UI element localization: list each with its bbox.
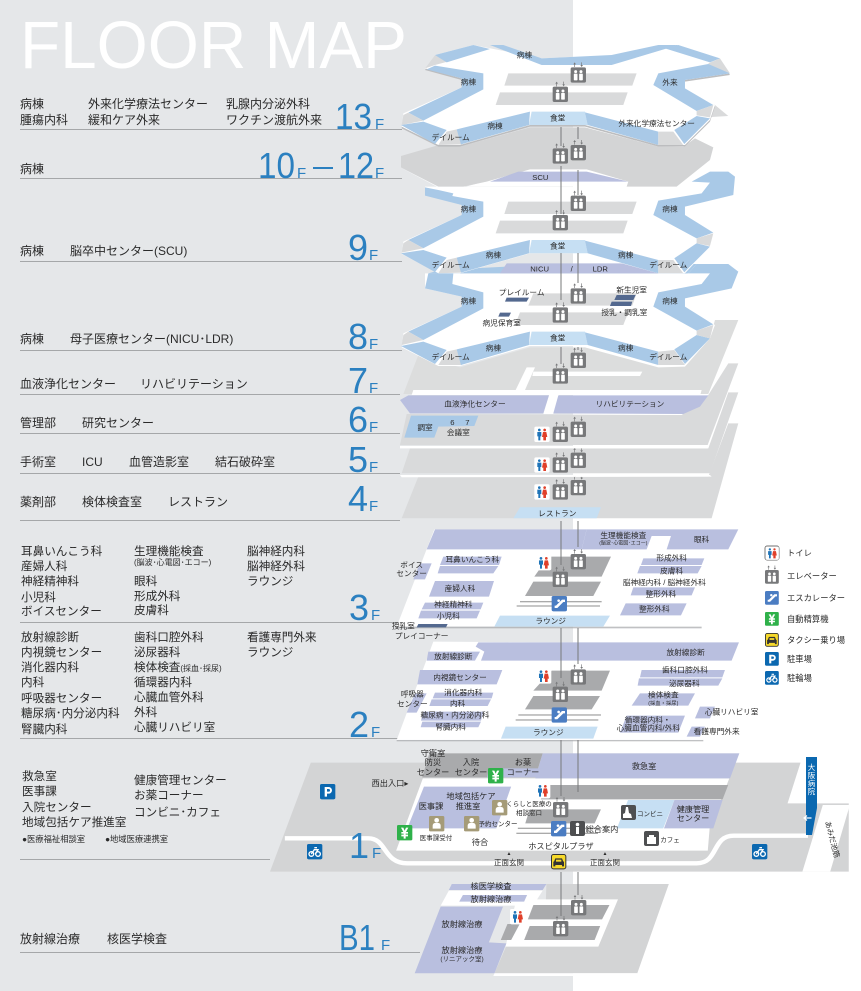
- 1F room labels: ▲: [507, 851, 511, 857]
- 1F room labels: 推進室: [456, 801, 480, 811]
- 1F room labels: 守衛室: [421, 748, 445, 758]
- floor list: 3F: (脳波･心電図･エコー): [134, 557, 212, 567]
- B1F department list: [20, 931, 167, 946]
- floor 3F plan: 皮膚科: [660, 565, 683, 575]
- floor list: 8F: 8: [348, 316, 368, 357]
- 7F plate: [400, 320, 738, 414]
- road sign: Osaka Hospital: 病: [808, 779, 816, 788]
- floor list: 2F: 看護専門外来: [247, 630, 317, 644]
- floor list: 2F: 循環器内科: [134, 675, 192, 689]
- floor list: 3F: ボイスセンター: [21, 605, 102, 618]
- floor list: 4F: 薬剤部: [20, 495, 56, 509]
- floor 3F plan: プレイコーナー: [395, 632, 448, 641]
- 1F room labels: 正面玄関: [494, 857, 524, 867]
- 1F room labels: 防災: [425, 757, 441, 767]
- 7F plate: 血液浄化センター: [444, 399, 506, 409]
- floor list: 10F-12F: [20, 145, 384, 186]
- B1F number: B1: [339, 917, 375, 958]
- floor 3F plan: 神経精神科: [434, 599, 473, 609]
- floor B1F plan: [20, 881, 669, 976]
- floor list: 4F: [20, 478, 378, 519]
- floor list: 1F: ●地域医療連携室: [105, 834, 168, 844]
- floor list: 8F: [20, 316, 378, 357]
- background panel: [0, 0, 573, 991]
- floor 13F plan: 病棟: [487, 121, 503, 131]
- floor list: 3F: 皮膚科: [134, 603, 169, 617]
- 6F plate: 会議室: [447, 427, 470, 437]
- floor 3F plan: センター: [396, 569, 427, 578]
- floor 3F plan: ボイス: [400, 560, 423, 569]
- floor list: 2F: 外科: [134, 705, 158, 719]
- floor 8F plan: [401, 263, 738, 366]
- floor 13F plan: デイルーム: [432, 132, 470, 142]
- floor 13F plan: 病棟: [517, 50, 532, 60]
- floor list: 2F: F: [371, 724, 380, 741]
- floor list: 5F: F: [369, 459, 378, 476]
- floor list: 3F: 3: [349, 587, 369, 628]
- B1F icons: [510, 895, 586, 936]
- legend: taxi stand: タクシー乗り場: [787, 635, 845, 645]
- B1F room labels: 核医学検査: [471, 881, 511, 891]
- floor list: 6F: [20, 399, 378, 440]
- floor list: 2F: 消化器内科: [21, 660, 79, 674]
- floor 13F plan: [401, 45, 730, 147]
- 1F room labels: 予約センター: [478, 819, 518, 828]
- floor list: 5F: 手術室: [20, 454, 56, 469]
- floor list: 5F: 5: [348, 439, 368, 480]
- 1F room labels: コーナー: [507, 768, 539, 777]
- floor 8F plan: 病棟: [461, 296, 476, 306]
- floor list: 3F: 脳神経内科: [247, 544, 305, 558]
- 1F number: 1: [349, 825, 369, 866]
- road sign: Osaka Hospital: 大: [808, 762, 816, 772]
- floor list: 10F-12F: F: [297, 165, 306, 182]
- floor 9F plan: デイルーム: [649, 260, 688, 270]
- floor 3F plan: 授乳室: [392, 620, 415, 630]
- floor list: 2F: 2: [349, 704, 369, 745]
- floor 2F plan: 糖尿病・内分泌内科: [421, 709, 490, 719]
- floor 8F plan: LDR: [593, 265, 608, 274]
- floor 8F plan: 病棟: [618, 343, 634, 353]
- floor 3F plan: 脳神経内科 / 脳神経外科: [623, 577, 706, 587]
- legend: [765, 546, 845, 685]
- floor list: 1F: 入院センター: [22, 801, 92, 814]
- 1F icons: [307, 768, 767, 869]
- floor 8F plan: 病棟: [662, 296, 678, 306]
- floor 2F plan: 内科: [450, 698, 466, 708]
- 1F room labels: センター: [417, 768, 449, 777]
- floor list: 4F: レストラン: [168, 495, 228, 509]
- floor 2F plan: 放射線診断: [666, 647, 705, 657]
- floor list: 3F: [21, 544, 380, 628]
- floor 9F plan: 食堂: [550, 241, 566, 251]
- road sign: Osaka Hospital: [804, 757, 817, 835]
- floor list: 5F: 血管造影室: [129, 454, 189, 469]
- floor list: 6F: 研究センター: [82, 416, 154, 430]
- floor 3F plan: 整形外科: [639, 604, 670, 614]
- 1F room labels: [372, 748, 709, 867]
- floor list: 2F: 検体検査(採血･採尿): [134, 660, 222, 674]
- floor 3F plan: 産婦人科: [445, 583, 476, 593]
- floor list: 1F: [22, 769, 227, 844]
- 1F room labels: ホスピタルプラザ: [528, 842, 594, 851]
- floor 10F-12F plan: [400, 127, 713, 187]
- floor 2F plan: 泌尿器科: [669, 678, 700, 688]
- floor list: 7F: 血液浄化センター: [20, 377, 116, 391]
- floor 8F plan: 新生児室: [616, 284, 647, 294]
- 1F room labels: 地域包括ケア: [446, 791, 496, 801]
- 1F room labels: 西出入口▸: [372, 778, 408, 788]
- floor list: 3F: 耳鼻いんこう科: [21, 544, 103, 558]
- floor 3F plan: 形成外科: [656, 553, 687, 563]
- floor list: 13F: [20, 96, 384, 137]
- floor 7F, 6F, 5F, 4F plans: [400, 320, 738, 518]
- floor list: 3F: 眼科: [134, 574, 158, 588]
- floor list: 3F: 神経精神科: [21, 574, 79, 588]
- 5F plate: [400, 392, 738, 477]
- floor list: 13F: 緩和ケア外来: [88, 113, 160, 127]
- B1F room labels: 放射線治療: [471, 894, 511, 904]
- floor list: 4F: 4: [348, 478, 368, 519]
- floor 2F plan: 心臓リハビリ室: [705, 706, 759, 716]
- floor list: 8F: F: [369, 336, 378, 353]
- floor list: 9F: 病棟: [20, 243, 44, 258]
- floor 9F plan: 病棟: [662, 204, 678, 214]
- floor list: 1F: 医事課: [22, 785, 57, 798]
- 1F room labels: 待合: [472, 837, 488, 847]
- floor 3F plan: 耳鼻いんこう科: [446, 554, 499, 564]
- floor list: 3F: 産婦人科: [21, 559, 68, 573]
- B1F shapes: [415, 884, 669, 976]
- floor 8F plan: 食堂: [550, 333, 566, 343]
- floor list: 9F: F: [369, 247, 378, 264]
- 1F number: F: [372, 845, 381, 862]
- floor list: 13F: 外来化学療法センター: [88, 96, 208, 111]
- floor 9F plan: 病棟: [486, 250, 501, 260]
- floor list: 5F: 結石破砕室: [215, 454, 275, 469]
- floor 8F plan: 授乳・調乳室: [601, 307, 648, 317]
- floor list: 2F: 泌尿器科: [134, 645, 181, 659]
- B1F room labels: (リニアック室): [440, 954, 484, 963]
- road sign: Osaka Hospital: 阪: [808, 771, 816, 780]
- floor 9F plan: デイルーム: [432, 260, 470, 270]
- floor 2F plan: 呼吸器: [401, 689, 424, 699]
- floor list: 5F: ICU: [82, 455, 103, 469]
- floor list: 3F: 脳神経外科: [247, 559, 305, 573]
- floor 9F plan: [401, 172, 735, 273]
- title: FLOOR MAP: [20, 8, 407, 83]
- B1F room labels: 放射線治療: [442, 945, 482, 955]
- floor 3F plan: 小児科: [437, 610, 460, 620]
- floor 3F plan: 眼科: [694, 534, 710, 544]
- floor list: 2F: 歯科口腔外科: [134, 630, 204, 644]
- floor list: 9F: 9: [348, 227, 368, 268]
- floor list: 13F: ワクチン渡航外来: [226, 113, 322, 127]
- floor 9F plan: 病棟: [618, 250, 634, 260]
- floor 2F plan: 看護専門外来: [694, 726, 740, 736]
- 1F room labels: ▲: [603, 851, 607, 857]
- floor list: 9F: 脳卒中センター(SCU): [70, 243, 187, 258]
- 1F room labels: 入院: [463, 758, 479, 767]
- B1F department list: 核医学検査: [107, 931, 167, 946]
- floor list: 1F: コンビニ･カフェ: [134, 806, 221, 819]
- floor list: 7F: リハビリテーション: [140, 377, 248, 391]
- 1F room labels: 医事課受付: [420, 833, 453, 842]
- floor list: 1F: 地域包括ケア推進室: [22, 815, 126, 829]
- 1F room labels: 相談窓口: [516, 808, 542, 817]
- floor 2F plan: センター: [397, 700, 428, 709]
- floor list: 13F: 13: [335, 96, 372, 137]
- floor list: 13F: 病棟: [20, 96, 44, 111]
- floor 3F plan: 整形外科: [646, 589, 677, 599]
- floor list: 2F: 腎臓内科: [21, 722, 68, 736]
- floor list: 2F: 糖尿病･内分泌内科: [21, 706, 120, 720]
- floor list: 6F: 管理部: [20, 415, 56, 430]
- floor list: 7F: [20, 360, 378, 401]
- floor 2F plan: 歯科口腔外科: [662, 665, 708, 675]
- 1F room labels: コンビニ: [637, 809, 663, 818]
- floor 8F plan: 病児保育室: [483, 318, 521, 328]
- 1F number: [349, 825, 381, 866]
- floor 2F plan: [397, 642, 759, 741]
- floor 13F plan: 病棟: [461, 76, 476, 86]
- floor 8F plan: /: [571, 265, 574, 274]
- floor list: 2F: ラウンジ: [247, 646, 293, 659]
- elevator shaft lines: [561, 127, 578, 916]
- floor 8F plan: NICU: [530, 265, 549, 274]
- floor 2F plan: 循環器内科・: [625, 715, 671, 725]
- floor list: 2F: 内視鏡センター: [21, 645, 102, 659]
- floor 2F plan: 検体検査: [648, 689, 679, 699]
- floor 2F plan: 心臓血管内科/外科: [617, 723, 680, 733]
- floor 2F plan: 放射線診断: [434, 651, 473, 661]
- floor divider lines: [20, 130, 420, 952]
- 1F room labels: 健康管理: [677, 804, 709, 814]
- 1F room labels: 正面玄関: [590, 857, 620, 867]
- floor list: 6F: 6: [348, 399, 368, 440]
- 4F plate: レストラン: [538, 509, 577, 518]
- floor list: 3F: 形成外科: [134, 589, 181, 603]
- legend: parking: 駐車場: [787, 654, 812, 664]
- floor list: 9F: [20, 227, 378, 268]
- 7F plate: リハビリテーション: [596, 400, 665, 409]
- floor 2F plan: 腎臓内科: [435, 721, 466, 731]
- floor list: 8F: 病棟: [20, 331, 44, 346]
- floor 3F plan: (脳波･心電図･エコー): [599, 539, 648, 546]
- floor list: 3F: 生理機能検査: [134, 544, 204, 558]
- floor 9F plan: 病棟: [461, 204, 476, 214]
- floor list: 13F: 腫瘍内科: [20, 113, 68, 127]
- floor list: 10F-12F: F: [375, 165, 384, 182]
- 6F plate: [400, 363, 738, 448]
- floor list: 6F: F: [369, 419, 378, 436]
- floor list: 7F: 7: [348, 360, 368, 401]
- floor 13F plan: 外来化学療法センター: [618, 118, 695, 128]
- floor 2F plan: 内視鏡センター: [433, 672, 487, 682]
- floor list: 10F-12F: 12: [338, 145, 374, 186]
- legend: bicycle parking: 駐輪場: [787, 673, 812, 683]
- floor list: 3F: ラウンジ: [247, 575, 293, 588]
- legend: escalator: エスカレーター: [787, 593, 845, 603]
- road label: あみだ池筋: [823, 820, 843, 859]
- floor 2F plan: (採血・採尿): [648, 699, 679, 707]
- floor 10F-12F plan: SCU: [532, 173, 548, 182]
- floor list: 5F: [20, 439, 378, 480]
- floor list: 2F: 内科: [21, 675, 45, 689]
- floor list: 4F: 検体検査室: [82, 495, 142, 509]
- floor list: 13F: F: [375, 116, 384, 133]
- 1F room labels: 救急室: [632, 761, 656, 771]
- 1F room labels: くらしと医療の: [506, 799, 552, 808]
- 6F plate: 6: [450, 418, 454, 427]
- floor list: 2F: 呼吸器センター: [21, 692, 102, 705]
- floor list: 2F: [21, 630, 380, 745]
- floor list: 2F: 心臓リハビリ室: [134, 721, 215, 734]
- 1F room labels: センター: [455, 768, 487, 777]
- 4F plate: [402, 423, 738, 518]
- 1F room labels: 医事課: [419, 801, 443, 811]
- floor 2F plan: 消化器内科: [444, 687, 483, 697]
- floor list: 1F: ●医療福祉相談室: [22, 834, 85, 844]
- 6F plate: 調室: [417, 422, 433, 432]
- floor list: 7F: F: [369, 380, 378, 397]
- floor list: 1F: 救急室: [22, 769, 57, 783]
- floor 2F plan: ラウンジ: [533, 728, 564, 737]
- B1F room labels: [440, 881, 511, 963]
- floor 8F plan: デイルーム: [432, 352, 470, 362]
- floor list: 1F: 健康管理センター: [134, 773, 227, 787]
- floor 8F plan: プレイルーム: [499, 288, 545, 297]
- road sign: Osaka Hospital: 院: [808, 787, 816, 796]
- legend: elevator: エレベーター: [787, 571, 837, 581]
- floor list: 3F: F: [371, 607, 380, 624]
- floor list: 10F-12F: 病棟: [20, 161, 44, 176]
- floor 13F plan: 食堂: [550, 113, 566, 123]
- 1F shapes: [270, 753, 850, 872]
- 6F plate: 7: [465, 418, 469, 427]
- 1F room labels: 総合案内: [586, 824, 618, 834]
- 1F room labels: お薬: [515, 757, 531, 767]
- legend: toilet: トイレ: [787, 548, 812, 558]
- 1F room labels: センター: [677, 814, 709, 823]
- floor 1F plan: [270, 748, 850, 872]
- floor list: 2F: 心臓血管外科: [134, 690, 204, 704]
- 1F room labels: カフェ: [660, 836, 680, 844]
- B1F room labels: 放射線治療: [442, 919, 482, 929]
- floor 3F plan: [392, 529, 738, 641]
- floor list: 13F: 乳腺内分泌外科: [226, 97, 310, 111]
- floor 3F plan: 生理機能検査: [600, 530, 647, 540]
- floor 8F plan: 病棟: [486, 343, 501, 353]
- floor list: 4F: F: [369, 498, 378, 515]
- floor list: 1F: お薬コーナー: [134, 789, 204, 802]
- B1F department list: 放射線治療: [20, 931, 80, 946]
- floor 3F plan: ラウンジ: [535, 616, 566, 625]
- floor list: 2F: 放射線診断: [21, 630, 79, 644]
- floor 13F plan: 外来: [662, 77, 678, 87]
- floor list: 8F: 母子医療センター(NICU･LDR): [70, 332, 233, 346]
- legend: automatic payment machine: 自動精算機: [787, 614, 829, 624]
- floor list: 10F-12F: 10: [258, 145, 295, 186]
- B1F number: F: [381, 937, 390, 954]
- floor list: 3F: 小児科: [21, 590, 56, 604]
- floor 8F plan: デイルーム: [649, 352, 688, 362]
